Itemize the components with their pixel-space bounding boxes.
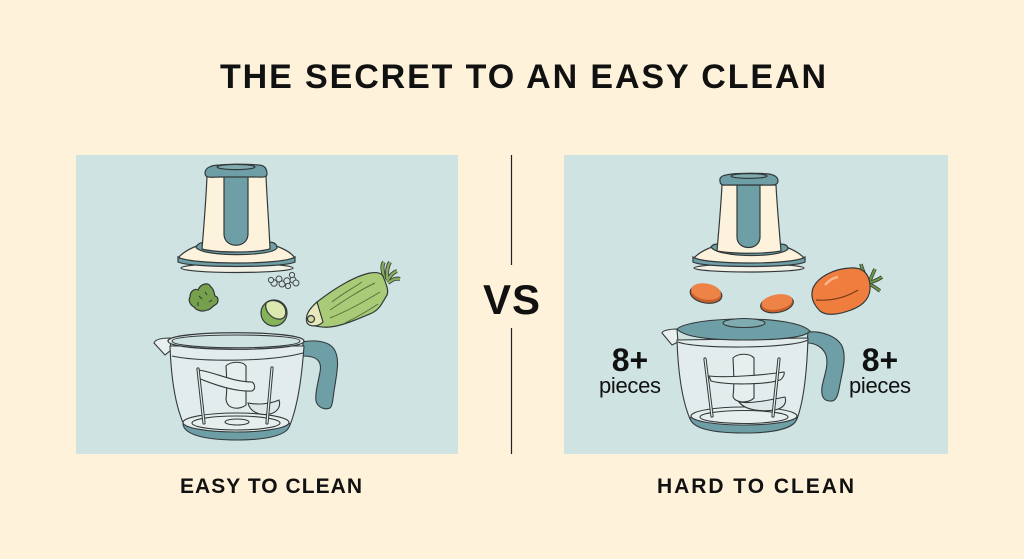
- callout: 8+ pieces right: pieces: [849, 373, 911, 398]
- callout: 8+ pieces left: [599, 342, 661, 398]
- icon: cut sprout: [261, 300, 287, 326]
- icon: bowl with lid: [662, 318, 844, 433]
- label: hard to clean: HARD TO CLEAN: [657, 475, 854, 498]
- icon: zucchini: [306, 262, 400, 327]
- icon: chopper lid, right: [693, 173, 805, 272]
- icon: tomato: [812, 264, 882, 314]
- title: THE SECRET TO AN EASY CLEAN: [220, 58, 826, 96]
- callout: 8+ pieces left: pieces: [599, 373, 661, 398]
- icon: chopper lid, left: [178, 164, 295, 272]
- divider: [510, 155, 512, 454]
- icon: carrot slice 1: [689, 281, 723, 306]
- label: easy to clean: EASY TO CLEAN: [180, 475, 362, 498]
- callout: 8+ pieces right: [849, 342, 911, 398]
- panel: hard to clean: [564, 155, 948, 454]
- callout: 8+ pieces left: 8+: [612, 342, 648, 378]
- icon: carrot slice 2: [759, 292, 795, 315]
- panel: easy to clean: [76, 155, 458, 454]
- icon: crumbs: [268, 272, 299, 289]
- icon: broccoli: [189, 284, 218, 311]
- vs label: VS: [483, 276, 540, 323]
- icon: bowl, left: [154, 333, 338, 440]
- callout: 8+ pieces right: 8+: [862, 342, 898, 378]
